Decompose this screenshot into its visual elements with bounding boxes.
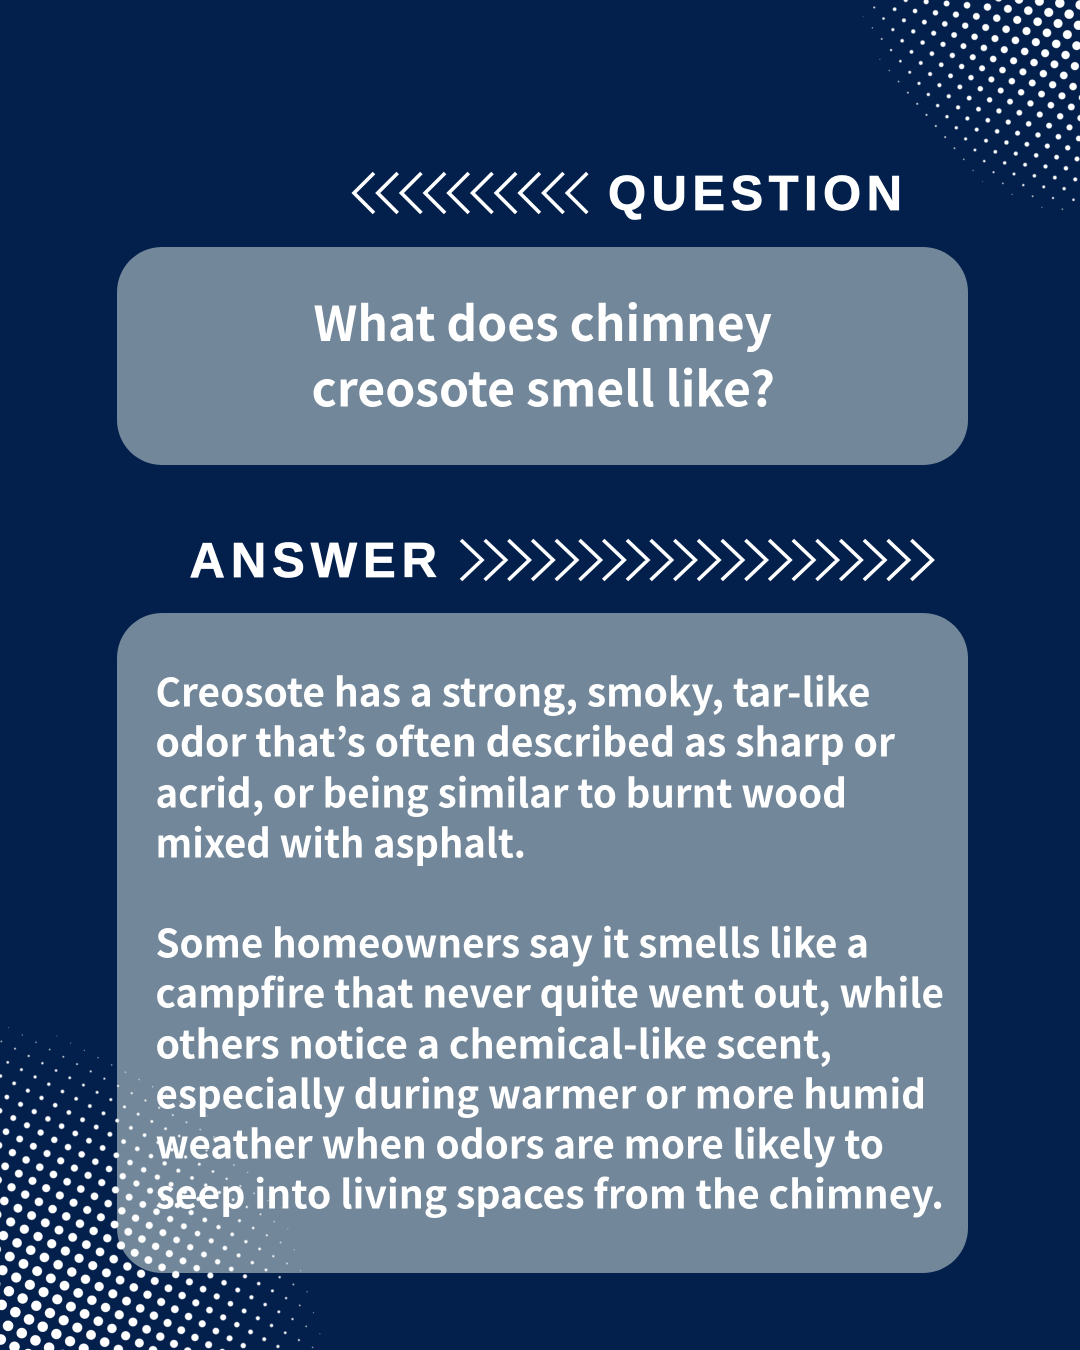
answer text: first paragraph [156, 662, 896, 870]
answer text: second paragraph: weather when odors are more likely to [156, 1114, 884, 1170]
answer text: second paragraph [156, 914, 944, 1220]
panel: question [117, 247, 968, 465]
heading text: answer: ANSWER [190, 534, 437, 588]
answer text: first paragraph: acrid, or being similar to burnt wood [156, 764, 847, 820]
answer text: second paragraph: especially during warmer or more humid [156, 1064, 926, 1120]
question text: What does chimney [314, 285, 772, 355]
panel: answer [117, 613, 968, 1273]
answer text: first paragraph: Creosote has a strong, smoky, tar-like [156, 662, 870, 718]
arrow: left chevrons [354, 173, 587, 213]
answer text: second paragraph: seep into living spaces from the chimney. [156, 1164, 944, 1220]
question text [312, 285, 775, 420]
question heading [354, 167, 902, 221]
answer text: second paragraph: Some homeowners say it smells like a [156, 914, 869, 970]
answer text: first paragraph: mixed with asphalt. [156, 814, 526, 870]
answer text: second paragraph: campfire that never quite went out, while [156, 964, 944, 1020]
arrow: right chevrons [461, 540, 932, 580]
answer text: second paragraph: others notice a chemical-like scent, [156, 1014, 832, 1070]
answer heading [190, 534, 932, 588]
question text: creosote smell like? [312, 350, 775, 420]
heading text: question: QUESTION [608, 167, 902, 221]
answer text: first paragraph: odor that’s often described as sharp or [156, 712, 896, 768]
